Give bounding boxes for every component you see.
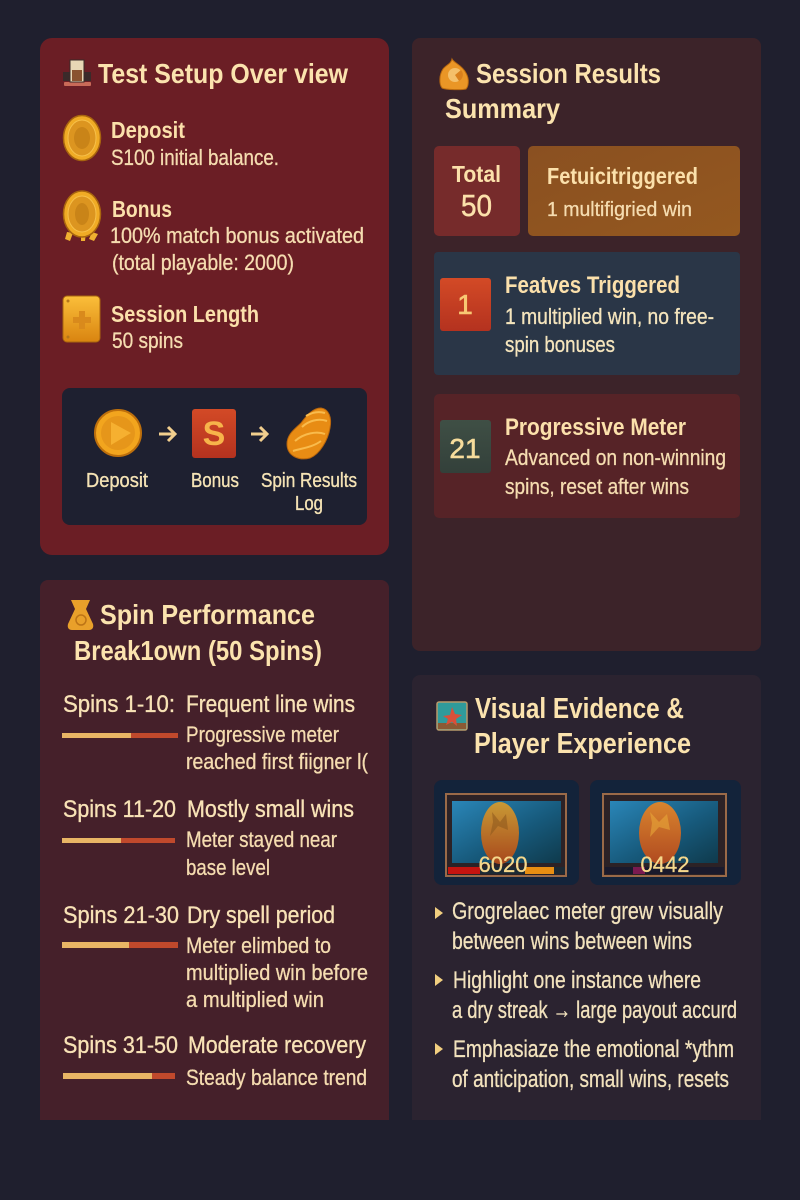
flow label: spin results log: Log [295, 493, 323, 515]
progress bar [62, 838, 175, 843]
badge: 1 [440, 278, 491, 331]
row: spins 1-10: Frequent line wins [186, 691, 355, 718]
icon: coin stack [287, 408, 331, 459]
arrow [251, 427, 267, 441]
card: progressive meter: spins, reset after wins [505, 474, 689, 499]
badge: 1: 1 [457, 289, 473, 320]
title: visual evidence and player experience [474, 693, 691, 760]
stat: feature triggered: 1 multifigried win [547, 199, 692, 221]
title: test setup overview: Test Setup Over view [98, 58, 348, 89]
row: spins 21-30: Spins 21-30 [63, 902, 179, 929]
icon: bonus S tile: S [203, 415, 225, 453]
icon: picture [437, 702, 467, 730]
screenshot: second game frame: 0442 [641, 852, 689, 877]
progress bar [63, 1073, 175, 1079]
flow label: spin results log: Spin Results [261, 470, 357, 492]
card: features triggered: spin bonuses [505, 332, 615, 357]
icon: play coin [95, 410, 141, 456]
icon: gold coin [64, 116, 100, 160]
title: visual evidence and player experience: Visual Evidence & [475, 693, 684, 725]
row: spins 21-30: Meter elimbed to [186, 933, 331, 958]
progress bar [62, 942, 178, 948]
card: features triggered: Featves Triggered [505, 272, 680, 299]
card: progressive meter [434, 394, 740, 518]
row: spins 31-50: Moderate recovery [188, 1032, 366, 1059]
row: spins 11-20: Meter stayed near [186, 827, 337, 852]
row: spins 1-10: Spins 1-10: [63, 691, 175, 718]
card: progressive meter: Advanced on non-winning [505, 445, 726, 470]
icon: medal [64, 191, 100, 241]
bullet: dry streak: Highlight one instance where [453, 967, 701, 994]
bullet: emotional rhythm: of anticipation, small wins, resets [452, 1066, 729, 1093]
row: spins 11-20 [62, 796, 354, 880]
row: spins 11-20: base level [186, 855, 270, 880]
row: spins 1-10: reached first fiigner l( [186, 749, 369, 774]
bullet: meter growth: Grogrelaec meter grew visually [452, 898, 723, 925]
row: spins 21-30: a multiplied win [186, 987, 324, 1012]
panel: session results summary [412, 38, 761, 651]
bonus text [110, 223, 364, 275]
stat: total spins: 50 [461, 188, 492, 223]
bonus text: (total playable: 2000) [112, 250, 294, 275]
panel: test setup overview [40, 38, 389, 555]
bullet: emotional rhythm: Emphasiaze the emotional *ythm [453, 1036, 734, 1063]
flow label: deposit: Deposit [86, 470, 148, 492]
card: progressive meter: Progressive Meter [505, 414, 686, 441]
row: spins 21-30: Dry spell period [187, 902, 335, 929]
screenshot: first game frame [434, 780, 579, 885]
item: session length [63, 296, 259, 353]
stat: feature triggered: Fetuicitriggered [547, 163, 698, 189]
badge: 21 [440, 420, 491, 473]
row: spins 31-50: Steady balance trend [186, 1065, 367, 1090]
icon: money bag [68, 600, 93, 630]
deposit heading: Deposit [111, 117, 185, 143]
title: session results summary: Session Results [476, 58, 661, 89]
title: spin performance breakdown [74, 599, 322, 666]
flow label: spin results log [261, 470, 357, 515]
panel: spin performance breakdown [40, 580, 389, 1120]
item: bonus [64, 191, 364, 275]
panel: visual evidence and player experience [412, 675, 761, 1120]
deposit text: S100 initial balance. [111, 145, 279, 170]
title: session results summary: Summary [445, 93, 560, 124]
row: spins 1-10 [62, 691, 369, 774]
session length text: 50 spins [112, 328, 183, 353]
bullet: emotional rhythm [435, 1036, 734, 1093]
card: features triggered [434, 252, 740, 375]
flow label: bonus: Bonus [191, 470, 239, 492]
bonus heading: Bonus [112, 196, 172, 222]
icon: gold plate [63, 296, 100, 342]
stat: feature triggered [528, 146, 740, 236]
stat: total spins [434, 146, 520, 236]
screenshot: second game frame [590, 780, 741, 885]
row: spins 11-20: Spins 11-20 [63, 796, 176, 823]
flow diagram [62, 388, 367, 525]
title: visual evidence and player experience: Player Experience [474, 728, 691, 760]
card: features triggered: 1 multiplied win, no free- [505, 304, 714, 329]
icon: flame coin [440, 59, 468, 90]
session length heading: Session Length [111, 301, 259, 327]
bonus text: 100% match bonus activated [110, 223, 364, 248]
row: spins 11-20: Mostly small wins [187, 796, 354, 823]
icon: server tower [63, 60, 91, 86]
row: spins 1-10: Progressive meter [186, 722, 339, 747]
progress bar [62, 733, 178, 738]
bullet: meter growth: between wins between wins [452, 928, 692, 955]
row: spins 31-50: Spins 31-50 [63, 1032, 178, 1059]
row: spins 31-50 [63, 1032, 367, 1090]
row: spins 21-30 [62, 902, 368, 1012]
bullet: dry streak [435, 967, 737, 1024]
item: deposit [64, 116, 279, 170]
title: spin performance breakdown: Break1own (50 Spins) [74, 635, 322, 666]
title: spin performance breakdown: Spin Performance [100, 599, 315, 630]
screenshot: first game frame: 6020 [479, 852, 527, 877]
arrow [159, 427, 175, 441]
icon: bonus S tile [192, 409, 236, 458]
badge: 21: 21 [449, 433, 481, 464]
bullet: meter growth [435, 898, 723, 955]
title: session results summary [445, 58, 661, 124]
stat: total spins: Total [452, 161, 501, 187]
row: spins 21-30: multiplied win before [186, 960, 368, 985]
